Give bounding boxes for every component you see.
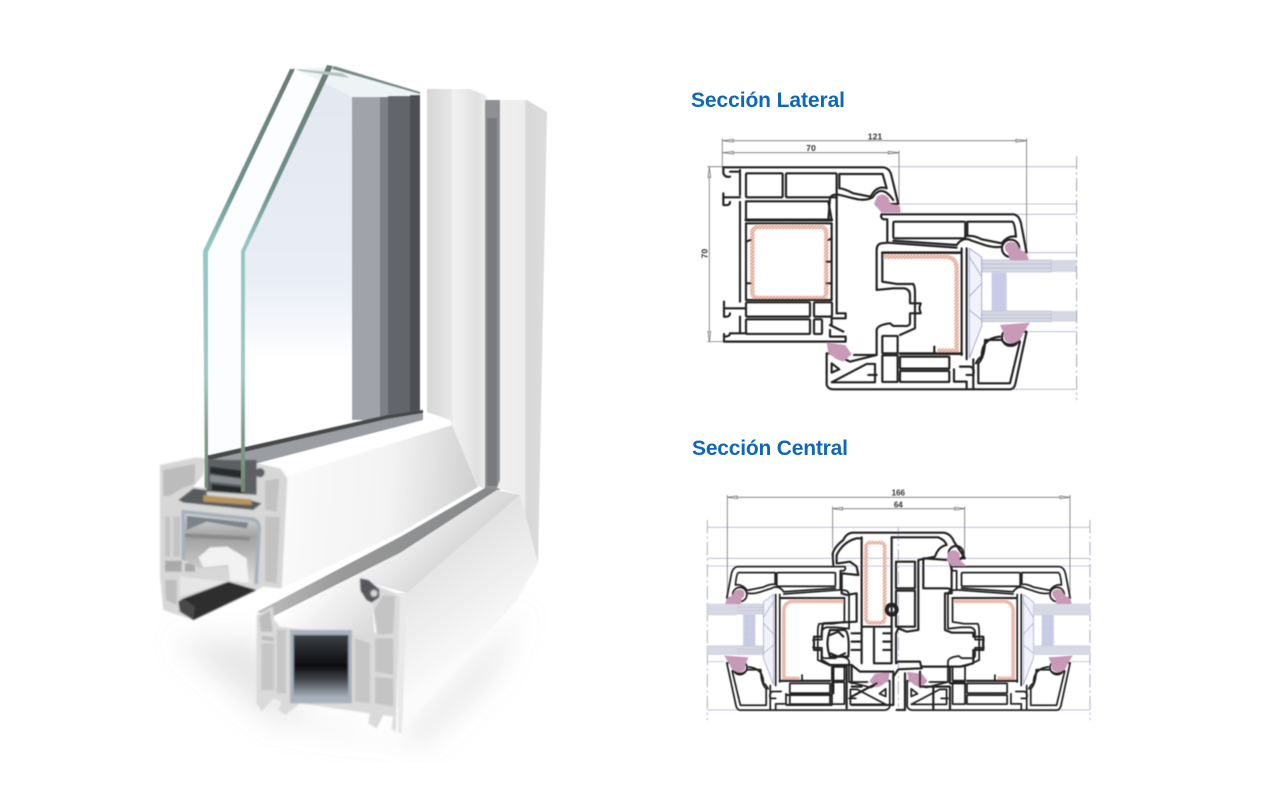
dark weather seal [178, 582, 257, 620]
diagram: lateral section [699, 131, 1077, 400]
right sash [907, 567, 1090, 710]
dimension labels [699, 131, 882, 258]
sash section [827, 214, 1051, 389]
heading: Sección Central: Sección Central [692, 437, 848, 460]
guide lines [707, 527, 1090, 710]
outer frame reinforcement [752, 227, 826, 298]
upper glass reflection [296, 67, 420, 97]
dimension labels [892, 489, 906, 509]
upper rail [257, 420, 478, 588]
upper cut profile [160, 457, 287, 620]
stile [427, 89, 487, 490]
dark inner frame bars [352, 95, 420, 420]
left sash [707, 567, 890, 710]
outer glass pane [203, 69, 295, 488]
lower cut profile [257, 578, 400, 732]
soft shadows [175, 610, 525, 745]
sill band [205, 410, 423, 480]
glass run out left and right [707, 604, 1090, 655]
heading: Sección Lateral: Sección Lateral [691, 89, 845, 112]
dimension lines [727, 495, 1070, 597]
dimension labels: 70 [806, 143, 816, 153]
glazing cavity [178, 488, 262, 510]
steel chamber [183, 512, 259, 584]
glass extension [1051, 260, 1077, 322]
guide lines [890, 167, 1077, 389]
outer stile [497, 100, 547, 563]
lower rail top surface [272, 490, 520, 640]
dimension labels: 121 [868, 131, 882, 141]
dimension labels: 64 [894, 500, 903, 509]
dimension labels: 70 [699, 249, 709, 258]
stile groove [485, 100, 500, 490]
dimension labels: 166 [892, 489, 906, 498]
centre lines [707, 520, 1090, 720]
top gasket [874, 194, 901, 213]
lower rail band [257, 488, 497, 617]
lower rail face [397, 495, 538, 733]
centre line [1075, 156, 1078, 400]
inner glass pane [241, 65, 333, 492]
diagram: central section [707, 489, 1090, 720]
mullion reinforcement [866, 543, 885, 623]
glass top edges [332, 66, 420, 94]
mullion profile [787, 533, 983, 710]
window cross-section photo [160, 65, 547, 745]
dimension lines [707, 138, 1027, 342]
mullion gasket [947, 550, 967, 566]
glass view area [244, 70, 420, 460]
outer frame profile [723, 167, 898, 342]
spacer [203, 495, 252, 505]
